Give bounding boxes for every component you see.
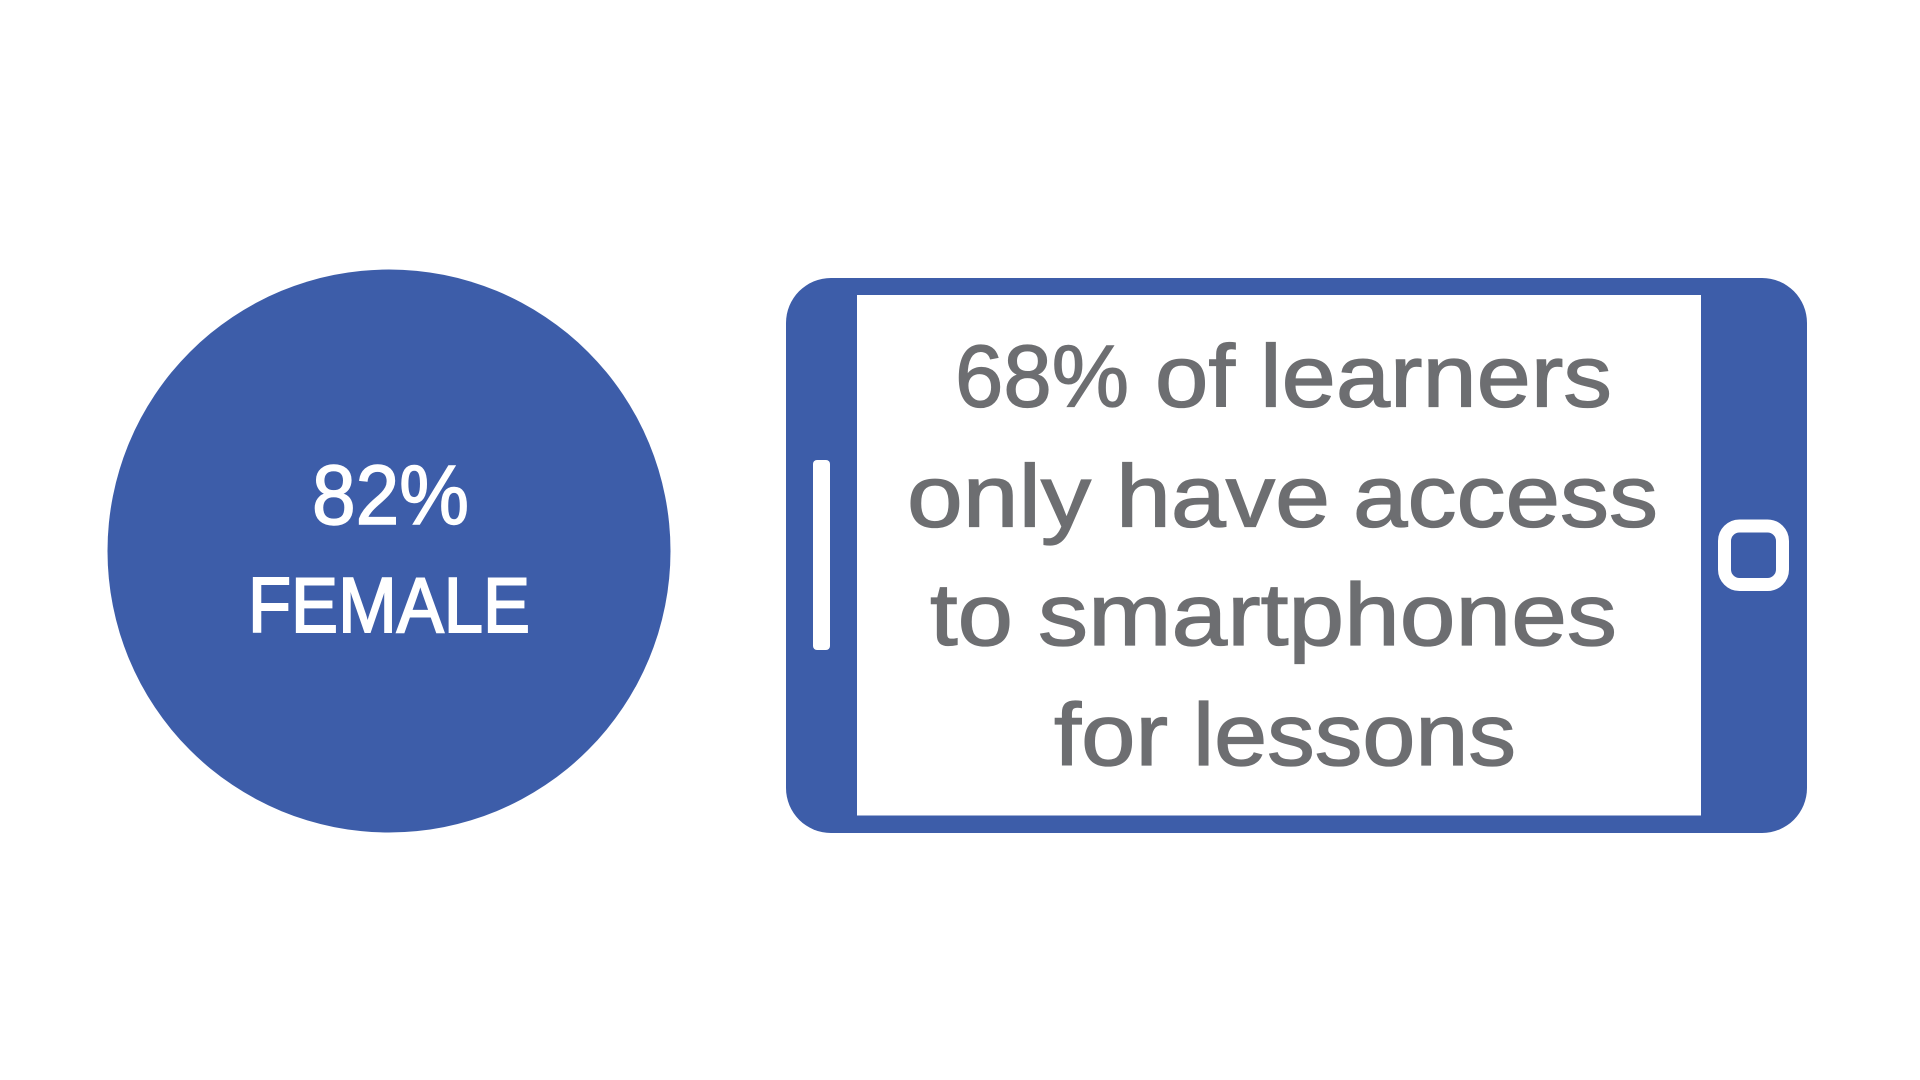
text block: 68% of learners only have access to smartphones for lessons [907, 326, 1658, 784]
text block: 68% of learners only have access to smartphones for lessons: smartphones [1038, 565, 1617, 664]
text block: 68% of learners only have access to smartphones for lessons: for [1054, 685, 1168, 784]
text block: 68% of learners only have access to smartphones for lessons: access [1353, 446, 1658, 546]
text block: 68% of learners only have access to smartphones for lessons: only [907, 446, 1091, 546]
phone speaker slot [813, 460, 830, 650]
text block: 68% of learners only have access to smartphones for lessons: to [930, 565, 1013, 664]
blue circle [108, 270, 670, 832]
panel: phone with smartphone statistic [786, 278, 1807, 833]
phone screen [857, 295, 1701, 816]
panel: female statistic circle [108, 270, 670, 832]
text: FEMALE: FEMALE [248, 561, 530, 649]
text block: 68% of learners only have access to smartphones for lessons: have [1116, 446, 1330, 546]
text block: 68% of learners only have access to smartphones for lessons: lessons [1193, 685, 1516, 784]
text block: 68% of learners only have access to smartphones for lessons: 68% [955, 326, 1129, 426]
text block: 68% of learners only have access to smartphones for lessons: of [1155, 326, 1236, 426]
phone body [786, 278, 1807, 833]
phone home button [1724, 526, 1782, 584]
text: 82%: 82% [312, 448, 469, 542]
text block: 68% of learners only have access to smartphones for lessons: learners [1260, 326, 1612, 426]
